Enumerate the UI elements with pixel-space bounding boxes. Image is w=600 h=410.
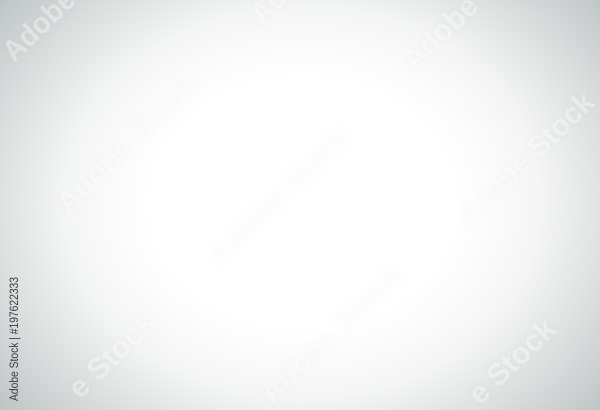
watermark: bottom centre: Adobe Stock — [254, 258, 409, 410]
watermark: bottom left: e Stock — [62, 306, 163, 405]
watermark: centre: Adobe Stock — [202, 119, 357, 271]
watermark: middle left: Adobe Stock — [50, 68, 205, 220]
watermark: bottom right: e Stock — [462, 312, 563, 410]
